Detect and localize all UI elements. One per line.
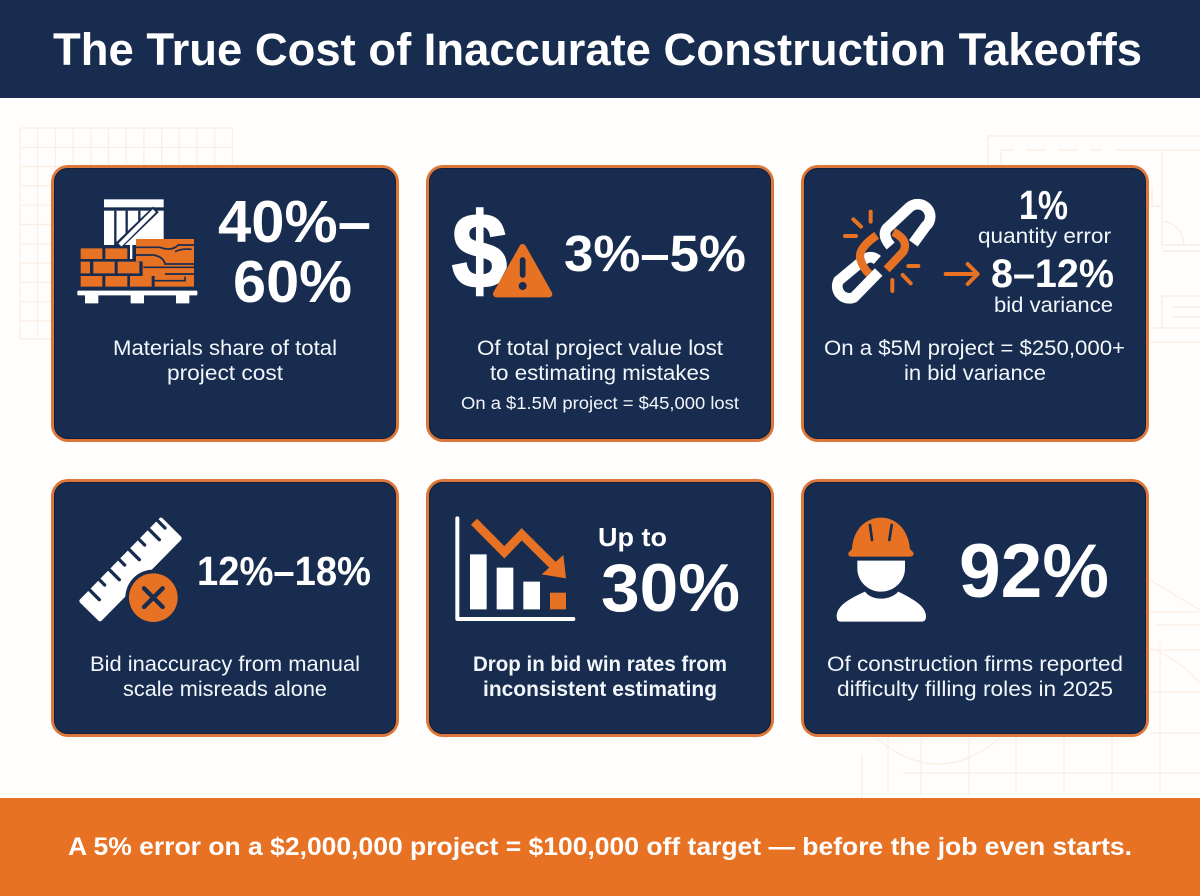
panel: scale misreads [51,479,399,737]
stat: 1% quantity error [978,182,1111,248]
description: estimating mistakes [461,336,739,413]
description: bid win rates [473,652,727,701]
description: scale misreads: scale misreads alone [123,677,327,701]
stat: 40%–60%: 60% [233,249,352,315]
stat: 3%–5%: 3%–5% [564,225,746,282]
icon: ruler with error mark [82,520,181,626]
description: labor shortage: Of construction firms reported [827,652,1123,676]
icon: dollar sign with warning [452,192,556,310]
description: bid variance: On a $5M project = $250,000+ [824,336,1125,360]
description: materials: Materials share of total [113,336,337,360]
description: estimating mistakes: to estimating mistakes [490,361,710,385]
description: scale misreads: Bid inaccuracy from manual [90,652,360,676]
description: labor shortage: difficulty filling roles in 2025 [837,677,1113,701]
background blueprint grid, top left [20,128,232,339]
footer takeaway text: A 5% error on a $2,000,000 project = $100,000 off target — before the job even starts. [68,833,1132,861]
stat: 1% quantity error: quantity error [978,225,1111,248]
description: bid variance: in bid variance [904,361,1046,385]
icon: declining bar chart [457,518,573,619]
description: scale misreads [90,652,360,701]
panel: labor shortage [801,479,1149,737]
panel: estimating mistakes [426,165,774,442]
icon: broken chain link [837,204,978,298]
panel: bid variance [801,165,1149,442]
stat: 40%–60%: 40%– [218,189,371,255]
description: estimating mistakes: Of total project value lost [477,336,723,360]
stat: 92%: 92% [959,529,1109,614]
panel: bid win rates [426,479,774,737]
stat: 12%–18%: 12%–18% [197,548,371,594]
header banner [0,0,1200,98]
stat: 8–12% bid variance: bid variance [994,294,1113,317]
description: bid variance [824,336,1125,385]
description: labor shortage [827,652,1123,701]
icon: worker with hard hat [837,518,926,622]
description: materials: project cost [167,361,283,385]
stat: up to 30%: 30% [601,550,740,626]
icon: materials on pallet [77,199,197,303]
description: bid win rates: inconsistent estimating [483,677,717,701]
footer banner [0,798,1200,896]
stat: 1% quantity error: 1% [1019,182,1068,228]
icon: dollar sign with warning: $ [452,192,507,310]
description: bid win rates: Drop in bid win rates from [473,652,727,676]
title: The True Cost of Inaccurate Construction Takeoffs [53,24,1142,75]
stat: 40%–60% [218,189,371,315]
description: materials [113,336,337,385]
background floor plan, top right [988,136,1200,342]
stat: 8–12% bid variance: 8–12% [991,252,1114,296]
background floor plan, bottom right [862,580,1200,798]
stat: 8–12% bid variance [991,252,1114,317]
stat: up to 30%: Up to [598,522,667,552]
description: estimating mistakes: On a $1.5M project = $45,000 lost [461,393,739,413]
panel: materials share [51,165,399,442]
